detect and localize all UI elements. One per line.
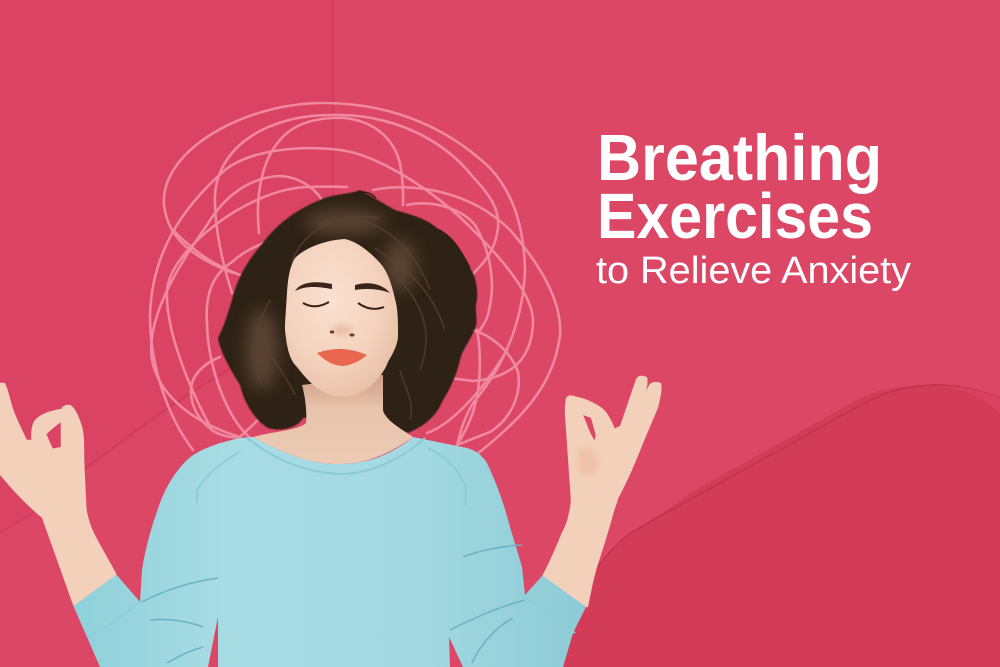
background curved shape bottom right <box>560 384 1000 667</box>
background diagonal crease <box>0 368 230 533</box>
cuff seams <box>87 597 575 637</box>
face <box>285 239 398 397</box>
hair back <box>218 190 477 433</box>
sweater collar <box>247 438 425 474</box>
sleeve folds right <box>450 545 525 663</box>
right arm and hand <box>544 377 660 606</box>
hair soft highlights <box>246 210 416 390</box>
left arm and hand <box>0 384 115 604</box>
sweater <box>73 437 588 667</box>
hand shading <box>578 449 598 475</box>
sleeve folds left <box>142 578 218 663</box>
nose <box>330 324 355 337</box>
eyebrows <box>295 282 390 293</box>
neck <box>253 375 413 464</box>
subtitle: to Relieve Anxiety <box>596 250 911 292</box>
title line 2: Exercises <box>597 180 873 252</box>
title <box>596 121 911 292</box>
flyaway strands <box>355 192 470 268</box>
sweater raglan seams <box>197 448 466 505</box>
woman <box>0 190 660 667</box>
hair strands <box>253 216 445 420</box>
closed eyes <box>303 302 384 309</box>
scribble lines <box>150 103 560 457</box>
background panel left <box>0 0 333 533</box>
lips <box>317 349 367 366</box>
background vertical crease <box>332 0 334 200</box>
title line 1: Breathing <box>597 121 882 194</box>
